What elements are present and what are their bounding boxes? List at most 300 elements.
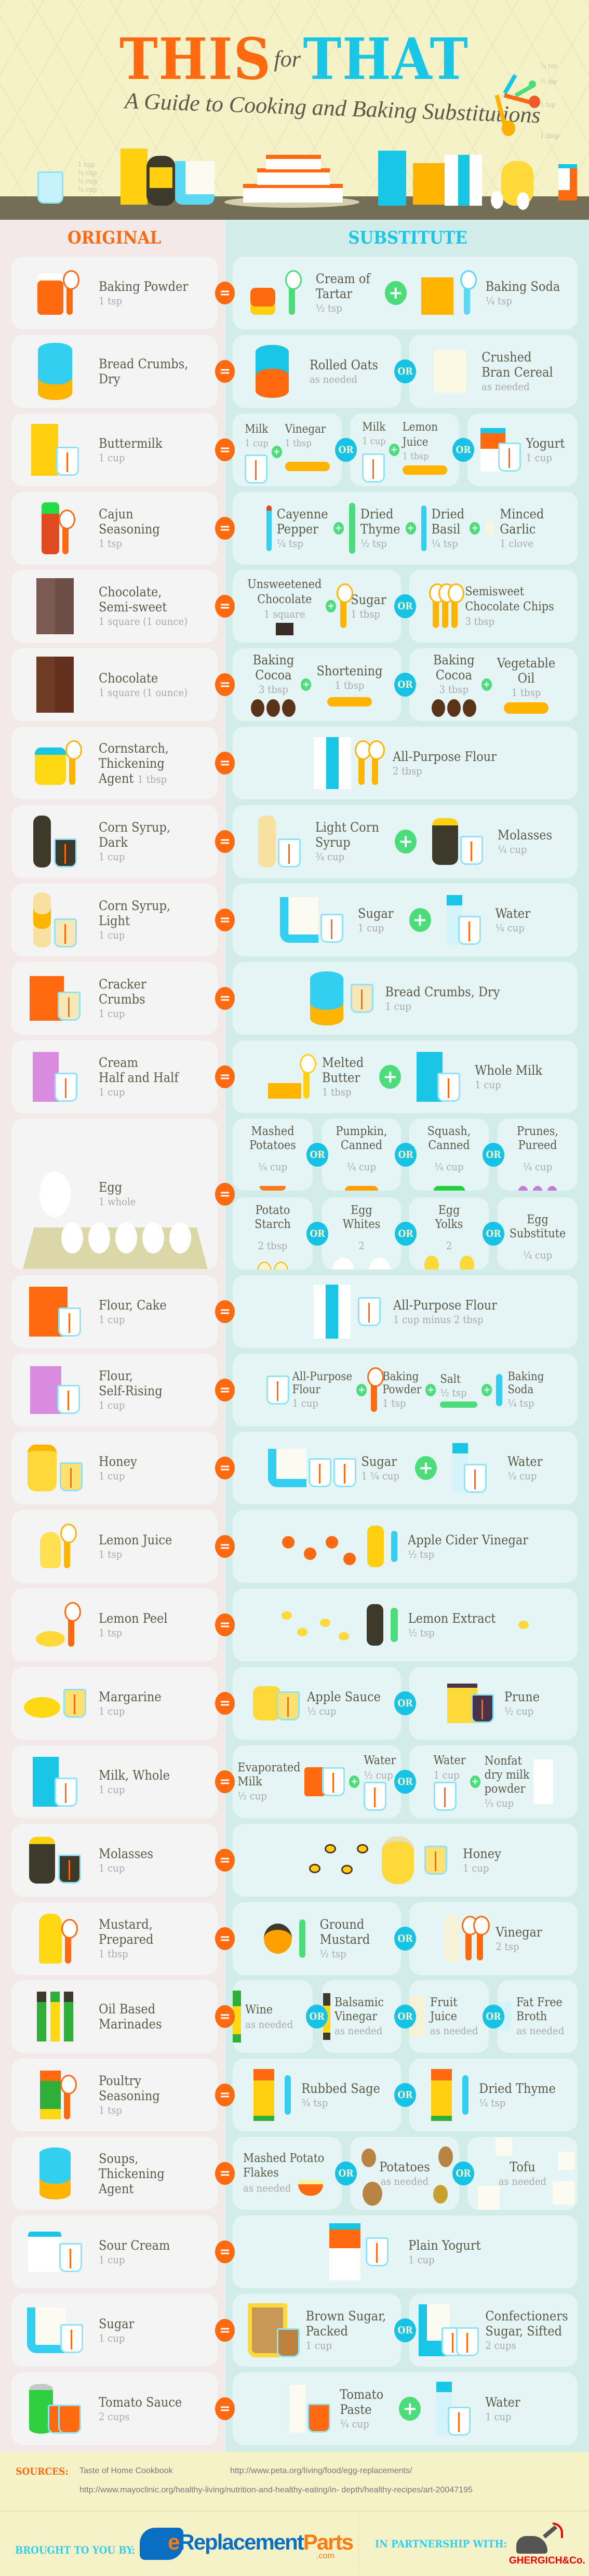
- substitute: light corn syrup + molasses: Molasses: [498, 827, 552, 843]
- row: margarine: [11, 1667, 578, 1740]
- substitute: apple cider vinegar: ½ tsp: [408, 1548, 434, 1560]
- or badge: OR: [397, 2325, 413, 2336]
- substitute: milk + vinegar: +: [273, 447, 280, 457]
- row: flour self-rising: [11, 1354, 578, 1426]
- substitute: flour + baking powder + salt + soda: +: [427, 1385, 434, 1395]
- substitute: apple sauce: ½ cup: [307, 1705, 336, 1717]
- substitute: melted butter + whole milk: [233, 1040, 578, 1113]
- substitute: flour + baking powder + salt + soda: 1 tsp: [382, 1397, 406, 1409]
- original: sour cream: Sour Cream: [99, 2238, 170, 2252]
- original: cornstarch, thickening agent: [11, 727, 218, 799]
- equals sign: [215, 2084, 235, 2106]
- or badge: [394, 359, 416, 383]
- row: poultry seasoning: [11, 2059, 578, 2131]
- equals sign: =: [219, 2087, 231, 2103]
- row: sour cream: [11, 2215, 578, 2288]
- substitute: baking cocoa + vegetable oil: Baking: [433, 652, 475, 668]
- equals sign: [215, 1927, 235, 1950]
- substitute: cayenne, thyme, basil, garlic: Minced: [500, 506, 544, 522]
- option: prunes: Pureed: [518, 1139, 557, 1152]
- substitute: fruit juice: [409, 1980, 489, 2053]
- original: chocolate, semi-sweet: [11, 570, 218, 643]
- substitute: cayenne, thyme, basil, garlic: Cayenne: [277, 506, 328, 522]
- equals sign: [215, 2319, 235, 2342]
- substitute: all-purpose flour minus: All-Purpose Flour: [393, 1298, 497, 1312]
- substitute: flour + baking powder + salt + soda: Baking: [507, 1370, 544, 1383]
- substitute: confectioners sugar: Confectioners: [485, 2308, 568, 2324]
- original: bread crumbs, dry: Dry: [99, 371, 121, 386]
- row: flour cake: [11, 1275, 578, 1348]
- substitute: balsamic vinegar: Balsamic: [334, 1996, 384, 2009]
- option: egg yolks: Yolks: [435, 1218, 463, 1231]
- option: egg whites: 2: [358, 1239, 365, 1252]
- equals sign: [215, 2005, 235, 2028]
- equals sign: [215, 1300, 235, 1323]
- substitute: confectioners sugar: [409, 2294, 578, 2367]
- substitute: mashed potato flakes: [233, 2137, 342, 2210]
- icon: measuring spoons: ¼ tsp: [540, 62, 557, 70]
- substitute: fruit juice: Fruit: [430, 1996, 458, 2009]
- substitute: rubbed sage: Rubbed Sage: [301, 2081, 380, 2095]
- icon: measuring spoons: [494, 62, 559, 140]
- substitute: balsamic vinegar: Vinegar: [334, 2010, 377, 2023]
- original: cornstarch, thickening agent: Agent 1 tbsp: [99, 771, 167, 785]
- original: lemon juice: 1 tsp: [99, 1548, 122, 1560]
- option: pumpkin: Pumpkin,: [336, 1125, 387, 1138]
- row: mustard: [11, 1902, 578, 1975]
- substitute: balsamic vinegar: as needed: [334, 2024, 382, 2037]
- substitute: potatoes: Potatoes: [379, 2159, 430, 2174]
- substitute: apple sauce: [233, 1667, 401, 1740]
- equals sign: =: [219, 755, 231, 771]
- option: egg substitute: [498, 1197, 578, 1270]
- credit: brought to you by: [15, 2528, 353, 2560]
- original: corn syrup, dark: Dark: [99, 835, 128, 850]
- original: sour cream: [11, 2215, 218, 2288]
- equals sign: =: [219, 1304, 231, 1319]
- substitute: water + nonfat dry milk powder: ⅓ cup: [485, 1796, 514, 1809]
- or badges: OR: [310, 1228, 325, 1239]
- equals sign: [215, 1613, 235, 1636]
- logo: eReplacementParts: eReplacementParts: [168, 2530, 353, 2554]
- substitute: baking cocoa + vegetable oil: +: [483, 679, 490, 690]
- or badge: [394, 2083, 416, 2107]
- substitute: fat free broth: [498, 1980, 578, 2053]
- substitute: mashed potato flakes: Flakes: [243, 2166, 279, 2180]
- equals sign: [215, 1849, 235, 1872]
- icon: measuring spoons: ½ tsp: [540, 78, 557, 86]
- original: cornstarch, thickening agent: Cornstarch,: [99, 741, 169, 755]
- original: flour, cake: [11, 1275, 218, 1348]
- original: honey: 1 cup: [99, 1469, 125, 1481]
- original: flour, cake: Flour, Cake: [99, 1298, 167, 1312]
- substitute: cream of tartar + baking soda: Cream of: [316, 271, 370, 286]
- equals sign: [215, 1535, 235, 1558]
- substitute: plain yogurt: [233, 2215, 578, 2288]
- option: pumpkin: ¼ cup: [347, 1160, 376, 1173]
- option: mashed potatoes: Mashed: [251, 1125, 294, 1138]
- original: honey: [11, 1432, 218, 1504]
- substitute: light corn syrup + molasses: +: [398, 831, 413, 852]
- substitute: brown sugar: 1 cup: [306, 2339, 332, 2352]
- original: milk, whole: [11, 1745, 218, 1818]
- substitute: cream of tartar + baking soda: +: [389, 283, 403, 303]
- equals sign: =: [219, 1696, 231, 1711]
- or badges: OR: [486, 1149, 501, 1160]
- option: potato starch: [233, 1197, 313, 1270]
- equals sign: [215, 987, 235, 1010]
- substitute: evaporated milk + water: Milk: [238, 1775, 262, 1788]
- option: egg whites: [322, 1197, 401, 1270]
- original: molasses: 1 cup: [99, 1862, 125, 1874]
- original: oil based marinades: [11, 1980, 218, 2053]
- or badge: [394, 673, 416, 697]
- row: lemon juice: [11, 1510, 578, 1583]
- substitute: confectioners sugar: 2 cups: [485, 2339, 516, 2352]
- substitute: semisweet chocolate chips: Chocolate Chips: [465, 600, 554, 613]
- icon: egg carton: [23, 1227, 208, 1269]
- substitute: yogurt: [467, 413, 578, 486]
- original: soups, thickening agent: [11, 2137, 218, 2210]
- original: chocolate: Chocolate: [99, 670, 158, 686]
- substitute: dried thyme: [409, 2059, 578, 2131]
- original: baking powder: [11, 257, 218, 329]
- substitute: rolled oats: Rolled Oats: [310, 357, 378, 372]
- substitute: milk + lemon juice: +: [391, 445, 398, 455]
- original: cracker crumbs: Cracker: [99, 977, 146, 992]
- original: soups, thickening agent: Soups,: [99, 2151, 139, 2166]
- or badge: [394, 1691, 416, 1715]
- substitute: baking cocoa + shortening: Cocoa: [255, 668, 292, 683]
- option: mashed potatoes: ¼ cup: [258, 1160, 287, 1173]
- substitute: rubbed sage: [233, 2059, 401, 2131]
- original: mustard, prepared: Mustard,: [99, 1917, 153, 1932]
- substitute: sugar + water: Sugar: [362, 1453, 397, 1469]
- or badge: OR: [397, 366, 413, 377]
- substitute: flour + baking powder + salt + soda: All-Purpose: [292, 1370, 352, 1383]
- original: lemon juice: Lemon Juice: [99, 1532, 172, 1547]
- or badge: OR: [397, 2011, 413, 2022]
- icons: potatoes and tofu: [362, 2137, 574, 2210]
- original: buttermilk: [11, 413, 218, 486]
- substitute: flour + baking powder + salt + soda: [233, 1354, 578, 1426]
- substitute: tomato paste + water: [233, 2372, 578, 2445]
- option: mashed potatoes: Potatoes: [249, 1139, 296, 1152]
- substitute: ground mustard: Mustard: [320, 1932, 370, 1947]
- equals sign: [215, 1182, 235, 1205]
- original: honey: Honey: [99, 1453, 137, 1469]
- original: tomato sauce: [11, 2372, 218, 2445]
- substitute: milk + lemon juice: 1 tbsp: [403, 451, 429, 462]
- substitute: baking cocoa + vegetable oil: Cocoa: [436, 668, 472, 683]
- substitute: unsweetened chocolate + sugar: Sugar: [351, 592, 386, 607]
- substitute: melted butter + whole milk: 1 cup: [475, 1078, 501, 1091]
- or badges: OR: [310, 1149, 325, 1160]
- original: buttermilk: Buttermilk: [99, 435, 162, 451]
- original: cream half and half: Half and Half: [99, 1070, 179, 1085]
- row: molasses: [11, 1824, 578, 1897]
- substitute: vinegar: Vinegar: [496, 1924, 542, 1940]
- substitute: tofu: as needed: [499, 2174, 546, 2187]
- substitute: bread crumbs, dry: [233, 962, 578, 1035]
- original: flour, self-rising: 1 cup: [99, 1399, 125, 1411]
- header background: [0, 0, 589, 220]
- sources: http://www.mayoclinic.org/healthy-living/nutrition-and-healthy-eating/in- depth/healthy-recipes/art-20047195: [79, 2486, 473, 2494]
- or badge: OR: [456, 444, 471, 456]
- substitute: milk + lemon juice: Lemon: [403, 421, 438, 434]
- or badge: OR: [397, 1933, 413, 1944]
- substitute: unsweetened chocolate + sugar: [233, 570, 401, 643]
- substitute: cayenne, thyme, basil, garlic: ¼ tsp: [432, 537, 458, 550]
- substitute: fruit juice: Juice: [430, 2010, 457, 2023]
- equals sign: =: [219, 2009, 231, 2024]
- substitute: cream of tartar + baking soda: Tartar: [316, 286, 352, 301]
- substitute: milk + vinegar: 1 cup: [245, 438, 269, 449]
- original: cajun seasoning: Seasoning: [99, 522, 160, 537]
- equals sign: [215, 2162, 235, 2185]
- logo: eReplacementParts: [140, 2528, 353, 2560]
- option: prunes: ¼ cup: [523, 1160, 552, 1173]
- substitute: sugar + water: [233, 884, 578, 956]
- illustration: ingredients on counter: ½ cup: [78, 178, 97, 185]
- original: oil based marinades: Oil Based: [99, 2001, 155, 2017]
- substitute: tofu: [467, 2137, 578, 2210]
- credit: in partnership with: [375, 2522, 585, 2566]
- option: potato starch: 2 tbsp: [258, 1239, 287, 1252]
- substitute: cayenne, thyme, basil, garlic: +: [335, 523, 342, 533]
- substitute: lemon extract: ½ tsp: [408, 1626, 435, 1638]
- equals sign: [215, 1379, 235, 1402]
- equals sign: =: [219, 2323, 231, 2338]
- substitute: plain yogurt: Plain Yogurt: [408, 2238, 481, 2252]
- or badge: [452, 2161, 474, 2185]
- substitute: prune: ½ cup: [504, 1705, 533, 1717]
- substitute: rubbed sage: ¾ tsp: [301, 2097, 328, 2109]
- original: margarine: Margarine: [99, 1689, 162, 1704]
- row: chocolate semi-sweet: [11, 570, 578, 643]
- original: mustard, prepared: 1 tbsp: [99, 1947, 128, 1960]
- substitute: all-purpose flour: [233, 727, 578, 799]
- original: bread crumbs, dry: [11, 335, 218, 408]
- original: sugar: 1 cup: [99, 2331, 125, 2344]
- or badges: [306, 1143, 504, 1246]
- original: egg: [11, 1118, 218, 1270]
- row: cream half and half: [11, 1040, 578, 1113]
- or badge: OR: [338, 444, 354, 456]
- or badge: [394, 1927, 416, 1951]
- substitute: apple cider vinegar: [233, 1510, 578, 1583]
- original: cajun seasoning: Cajun: [99, 506, 133, 522]
- equals sign: =: [219, 1186, 231, 1202]
- substitute: cayenne, thyme, basil, garlic: ¼ tsp: [277, 537, 303, 550]
- logo: ghergich & co elephant: [509, 2522, 585, 2566]
- subtitle: A Guide to Cooking and Baking Substitutions: [124, 88, 541, 128]
- row: oil based marinades: [11, 1980, 578, 2053]
- substitute: confectioners sugar: Sugar, Sifted: [485, 2324, 562, 2339]
- substitute: semisweet chocolate chips: [409, 570, 578, 643]
- substitute: flour + baking powder + salt + soda: 1 cup: [292, 1397, 318, 1409]
- substitute: fruit juice: as needed: [430, 2024, 478, 2037]
- substitute: brown sugar: Packed: [306, 2324, 348, 2339]
- original: chocolate: [11, 648, 218, 721]
- substitute: brown sugar: Brown Sugar,: [306, 2308, 386, 2324]
- substitute: sugar + water: Water: [496, 906, 530, 920]
- option: potato starch: Potato: [256, 1204, 290, 1217]
- equals sign: [215, 1692, 235, 1715]
- row: lemon peel: [11, 1589, 578, 1661]
- substitute: fat free broth: as needed: [516, 2024, 564, 2037]
- substitute: baking cocoa + vegetable oil: 3 tbsp: [439, 683, 468, 696]
- equals sign: =: [219, 677, 231, 692]
- or badges: OR: [398, 1149, 413, 1160]
- equals sign: =: [219, 598, 231, 614]
- substitute: sugar + water: ¼ cup: [507, 1469, 537, 1481]
- sources: [16, 2466, 473, 2494]
- equals sign: [215, 909, 235, 931]
- substitute: milk + lemon juice: 1 cup: [362, 436, 386, 447]
- substitute: dried thyme: ¼ tsp: [479, 2097, 505, 2109]
- option: pumpkin: Canned: [341, 1139, 382, 1152]
- substitute: evaporated milk + water: ½ cup: [238, 1790, 267, 1802]
- substitute: light corn syrup + molasses: Syrup: [315, 835, 351, 850]
- substitute: honey: Honey: [463, 1846, 501, 1861]
- substitute: melted butter + whole milk: Whole Milk: [475, 1063, 542, 1077]
- equals sign: =: [219, 1617, 231, 1633]
- substitute: baking cocoa + shortening: Baking: [253, 652, 294, 668]
- original: baking powder: 1 tsp: [99, 294, 122, 306]
- original: flour, cake: 1 cup: [99, 1313, 125, 1326]
- substitute: apple sauce: Apple Sauce: [307, 1689, 381, 1704]
- original: cracker crumbs: 1 cup: [99, 1007, 125, 1020]
- substitute: rolled oats: [233, 335, 401, 408]
- original: lemon peel: Lemon Peel: [99, 1610, 168, 1626]
- substitute: cayenne, thyme, basil, garlic: Pepper: [277, 522, 318, 537]
- original: corn syrup, dark: [11, 805, 218, 878]
- substitute: honey: 1 cup: [463, 1862, 489, 1874]
- option: egg whites: Egg: [351, 1204, 372, 1217]
- or badges: OR: [398, 1228, 413, 1239]
- illustration: ingredients on counter: ¾ cup: [78, 169, 97, 177]
- row: cornstarch: [11, 727, 578, 799]
- substitute: cayenne, thyme, basil, garlic: 1 clove: [500, 537, 533, 550]
- substitute: fat free broth: Broth: [516, 2010, 547, 2023]
- equals sign: [215, 438, 235, 461]
- option: egg whites: Whites: [343, 1218, 380, 1231]
- illustration: ingredients on counter: ¼ cup: [78, 186, 97, 194]
- illustration: ingredients on counter: 1 cup: [78, 161, 95, 169]
- or badge: OR: [309, 2011, 325, 2022]
- substitute: apple cider vinegar: Apple Cider Vinegar: [408, 1532, 528, 1547]
- substitute: light corn syrup + molasses: ¼ cup: [498, 843, 527, 855]
- equals sign: =: [219, 1460, 231, 1476]
- substitute: tomato paste + water: Tomato: [340, 2387, 383, 2402]
- equals sign: =: [219, 520, 231, 536]
- substitute: vinegar: [409, 1902, 578, 1975]
- original: chocolate: 1 square (1 ounce): [99, 686, 188, 698]
- substitute: potatoes: [350, 2137, 459, 2210]
- substitute: milk + lemon juice: Milk: [362, 421, 385, 434]
- substitute: prune: [409, 1667, 578, 1740]
- original: cream half and half: Cream: [99, 1055, 138, 1070]
- original: chocolate, semi-sweet: 1 square (1 ounce): [99, 615, 188, 628]
- original: corn syrup, light: 1 cup: [99, 929, 125, 941]
- original: flour, self-rising: Flour,: [99, 1368, 133, 1383]
- equals sign: [215, 517, 235, 540]
- original: mustard, prepared: [11, 1902, 218, 1975]
- row: corn syrup dark: [11, 805, 578, 878]
- substitute: water + nonfat dry milk powder: [409, 1745, 578, 1818]
- option: prunes: Prunes,: [517, 1125, 558, 1138]
- row: milk whole: [11, 1745, 578, 1818]
- equals sign: [215, 673, 235, 696]
- substitute: crushed bran cereal: Crushed: [481, 350, 531, 365]
- substitute: tomato paste + water: Paste: [340, 2402, 372, 2417]
- substitute: sugar + water: ¼ cup: [496, 922, 525, 934]
- logo: ghergich & co elephant: GHERGICH&Co.: [509, 2555, 585, 2566]
- original: poultry seasoning: Seasoning: [99, 2088, 160, 2103]
- substitute: water + nonfat dry milk powder: 1 cup: [434, 1768, 460, 1781]
- substitute: all-purpose flour minus: [233, 1275, 578, 1348]
- original: tomato sauce: Tomato Sauce: [99, 2395, 182, 2409]
- original: chocolate, semi-sweet: Semi-sweet: [99, 599, 167, 615]
- substitute: unsweetened chocolate + sugar: Chocolate: [257, 593, 312, 606]
- substitute: cream of tartar + baking soda: Baking Soda: [486, 278, 560, 294]
- equals sign: =: [219, 442, 231, 458]
- equals sign: =: [219, 1382, 231, 1398]
- substitute: melted butter + whole milk: 1 tbsp: [322, 1086, 352, 1098]
- original: chocolate, semi-sweet: Chocolate,: [99, 584, 162, 599]
- substitute: sugar + water: +: [419, 1458, 433, 1478]
- substitute: water + nonfat dry milk powder: Water: [434, 1754, 466, 1767]
- substitute: cayenne, thyme, basil, garlic: ½ tsp: [360, 537, 387, 550]
- substitute: evaporated milk + water: Water: [364, 1754, 396, 1767]
- substitute: flour + baking powder + salt + soda: Powder: [382, 1383, 421, 1396]
- substitute: crushed bran cereal: as needed: [481, 380, 529, 393]
- substitute: dried thyme: Dried Thyme: [479, 2081, 556, 2095]
- option: egg substitute: Substitute: [510, 1227, 566, 1240]
- equals sign: [215, 1457, 235, 1479]
- substitute: evaporated milk + water: [233, 1745, 401, 1818]
- heading: original: ORIGINAL: [68, 228, 161, 248]
- or badge: [335, 2161, 357, 2185]
- original: tomato sauce: 2 cups: [99, 2410, 130, 2423]
- original: flour, self-rising: Self-Rising: [99, 1383, 163, 1398]
- or badge: OR: [456, 2168, 471, 2179]
- substitute: milk + vinegar: Milk: [245, 423, 268, 436]
- substitute: baking cocoa + vegetable oil: Vegetable: [497, 656, 555, 671]
- equals sign: =: [219, 1539, 231, 1554]
- panel: original column background: [0, 220, 225, 2452]
- original: cream half and half: [11, 1040, 218, 1113]
- option: egg substitute: ¼ cup: [523, 1249, 552, 1261]
- sources: SOURCES:: [16, 2466, 69, 2477]
- original: egg: 1 whole: [99, 1195, 136, 1208]
- equals sign: =: [219, 2244, 231, 2260]
- heading: substitute: SUBSTITUTE: [348, 228, 467, 248]
- original: sour cream: 1 cup: [99, 2253, 125, 2266]
- substitute: baking cocoa + shortening: 1 tbsp: [335, 678, 364, 691]
- substitute: baking cocoa + shortening: [233, 648, 401, 721]
- substitute: unsweetened chocolate + sugar: 1 tbsp: [351, 608, 380, 620]
- illustration: ingredients on counter: [37, 149, 577, 210]
- substitute: baking cocoa + vegetable oil: Oil: [518, 671, 534, 686]
- equals sign: [215, 360, 235, 383]
- equals sign: =: [219, 285, 231, 301]
- original: corn syrup, dark: 1 cup: [99, 850, 125, 863]
- substitute: cayenne, thyme, basil, garlic: Thyme: [360, 522, 400, 537]
- logo: eReplacementParts: .com: [316, 2552, 334, 2560]
- sources: http://www.peta.org/living/food/egg-replacements/: [230, 2466, 412, 2475]
